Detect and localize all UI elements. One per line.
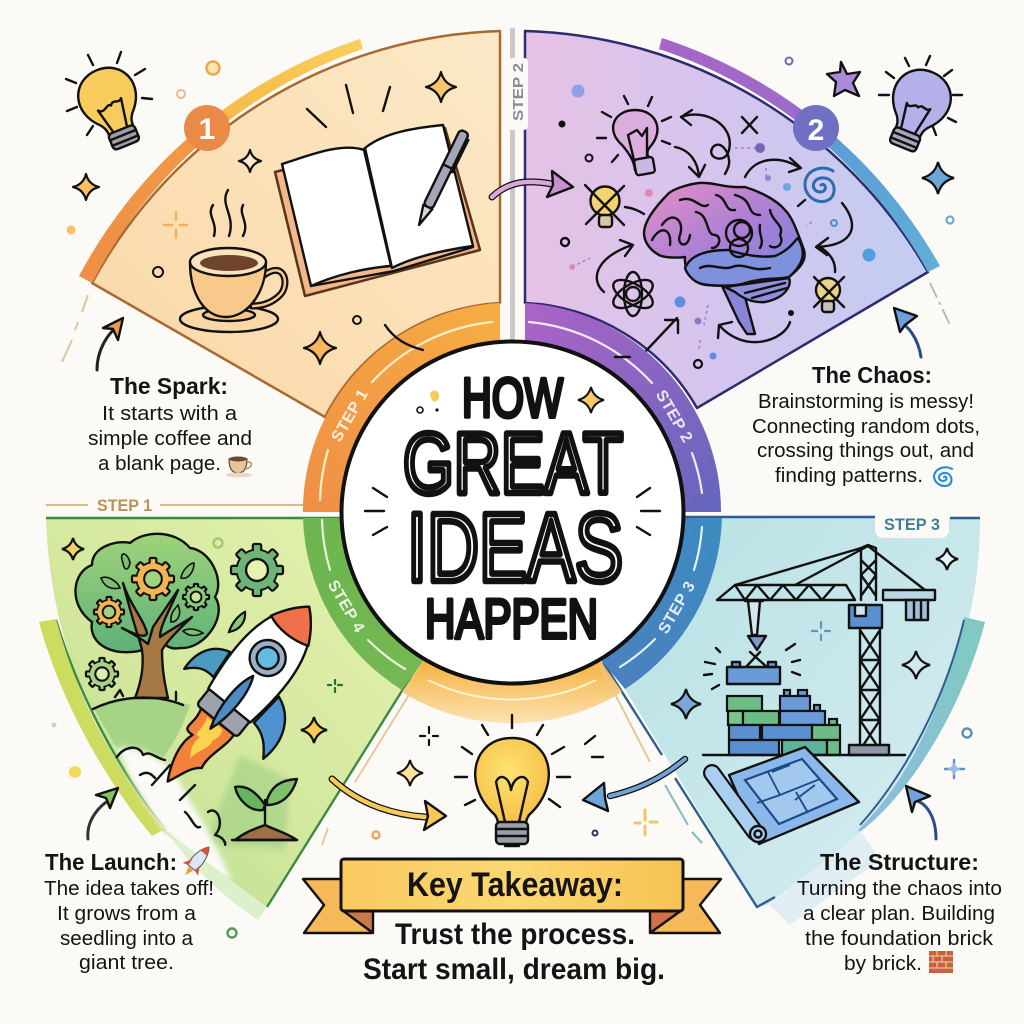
badge: number 2: 2	[808, 114, 824, 147]
divider: top vertical with step 2 tag	[508, 28, 528, 340]
arrow: spark caption	[97, 318, 123, 370]
icon: blue sparkle	[922, 162, 954, 194]
icon: central lightbulb	[372, 715, 657, 846]
ground line	[703, 754, 905, 756]
outer strip: lime	[39, 619, 165, 836]
wedge: blue	[625, 518, 980, 907]
icon: brick wall	[727, 690, 840, 755]
wedge: green	[46, 518, 420, 907]
icon: large gear	[231, 544, 283, 596]
decor: small sparkles and rings	[665, 622, 972, 843]
icon: lightbulb rays	[66, 52, 152, 135]
icon: crossed bulb right	[814, 277, 844, 312]
title decorations	[365, 387, 660, 535]
icon: lightbulb	[70, 59, 154, 156]
icon: hill line	[93, 690, 183, 709]
takeaway text	[363, 918, 665, 986]
icon: mini spiral	[934, 467, 952, 486]
icon: sparkles	[73, 72, 456, 364]
outer strip: purple to blue	[659, 38, 940, 272]
icon: blueprint	[712, 747, 859, 844]
arrows: scribbled	[597, 110, 852, 353]
soft green patch	[205, 755, 290, 850]
caption: the launch: The idea takes off!	[44, 878, 214, 900]
ring: step 1: STEP 1	[328, 386, 372, 445]
arrow: chaos caption	[894, 308, 921, 357]
caption: the structure: the foundation brick	[805, 928, 994, 950]
ring: bottom yellow	[322, 660, 650, 845]
center circle	[342, 342, 684, 684]
ribbon tails	[303, 879, 372, 933]
icon: mini brick	[929, 951, 953, 973]
icon: smoke	[117, 748, 225, 845]
badge: number 1	[184, 105, 230, 151]
caption: the chaos: finding patterns.	[775, 465, 923, 487]
icon: star	[827, 62, 860, 96]
badge: number 2	[793, 105, 839, 151]
ribbon main	[341, 859, 683, 911]
caption: the spark: a blank page.	[98, 453, 221, 475]
title: how great ideas happen: HOW	[462, 366, 563, 429]
arrow: launch to takeaway	[332, 779, 446, 830]
decor: green dots	[52, 538, 342, 938]
pale lower fade	[165, 830, 267, 920]
icon: crossed bulb left	[585, 185, 624, 227]
icon: tree	[75, 534, 219, 698]
icon: crane	[717, 545, 935, 755]
icon: falling brick	[704, 644, 800, 689]
divider: left horizontal with step 1 label: STEP 1	[97, 496, 152, 515]
decor: coloured dots	[558, 58, 954, 368]
wedge: orange	[92, 31, 500, 417]
ring: step 3: STEP 3	[655, 578, 699, 637]
icon: idea bulb	[597, 96, 671, 176]
banner: key takeaway	[303, 859, 721, 933]
caption: the structure: a clear plan. Building	[803, 903, 995, 925]
caption: the spark	[88, 373, 252, 478]
title: how great ideas happen: HAPPEN	[425, 587, 598, 650]
caption: the chaos: crossing things out, and	[757, 440, 974, 462]
panel: step 4 the launch	[39, 518, 420, 938]
banner text: Key Takeaway:	[407, 866, 623, 904]
caption: the spark: The Spark:	[110, 373, 228, 399]
caption: the structure: Turning the chaos into	[797, 878, 1002, 900]
title: how great ideas happen	[403, 366, 623, 650]
scribble marks over ring	[385, 325, 630, 357]
fade lower right	[770, 830, 880, 925]
white fade and smoke	[118, 747, 232, 880]
title: how great ideas happen: GREAT	[403, 416, 623, 512]
arrow: launch caption	[88, 788, 118, 839]
badge: number 1: 1	[199, 113, 215, 146]
arrow: structure to takeaway	[583, 759, 685, 811]
gear: orange small	[94, 597, 124, 627]
icon: open book with pen	[275, 125, 480, 296]
caption: the launch: It grows from a	[57, 903, 197, 925]
wedge outline: green	[46, 518, 420, 907]
outer strip: orange to yellow	[79, 39, 363, 283]
arc line	[860, 620, 964, 825]
icon: x mark	[742, 117, 757, 133]
icon: rocket	[122, 570, 357, 820]
icon: spiral	[805, 168, 834, 202]
divider: top vertical with step 2 tag: STEP 2	[510, 63, 527, 121]
takeaway text: Start small, dream big.	[363, 953, 665, 986]
icon: small gear	[86, 658, 118, 690]
caption: the launch: seedling into a	[60, 928, 194, 950]
icon: lightbulb purple	[875, 56, 962, 158]
icon: sprout	[232, 779, 297, 840]
caption: the launch: giant tree.	[79, 952, 174, 974]
caption: the chaos: Connecting random dots,	[752, 416, 980, 438]
caption: the chaos: The Chaos:	[812, 362, 932, 388]
step 3 label: STEP 3	[884, 515, 940, 534]
icon: mini coffee	[226, 456, 252, 478]
icon: brain	[644, 183, 805, 334]
ring: step 4: STEP 4	[324, 577, 368, 636]
wedge outline	[683, 517, 980, 518]
step 3 label	[875, 510, 949, 538]
arrow: structure caption	[906, 786, 936, 839]
ring: step 4	[303, 518, 424, 690]
caption: the launch	[44, 841, 217, 974]
caption: the structure	[797, 849, 1002, 975]
outer strip: teal	[858, 617, 985, 832]
panel: step 3 the structure	[603, 510, 985, 925]
ribbon folds	[342, 910, 373, 933]
caption: the launch: The Launch:	[45, 849, 177, 875]
ring: step 1	[303, 303, 500, 512]
caption: the chaos: Brainstorming is messy!	[758, 391, 974, 413]
wedge: purple	[525, 31, 928, 408]
gear: green small in tree	[183, 584, 209, 610]
panel: step 2 the chaos	[525, 31, 962, 408]
icon: atom scribble	[609, 272, 657, 316]
icon: sparkles and leaf	[62, 538, 327, 743]
caption: the chaos	[752, 362, 980, 487]
ring: step 3	[601, 518, 722, 689]
takeaway text: Trust the process.	[395, 918, 635, 951]
icon: mini rocket	[177, 841, 217, 882]
panel: step 1 the spark	[62, 31, 500, 417]
decor: circles and rays	[62, 62, 390, 362]
caption: the structure: The Structure:	[820, 849, 979, 875]
gear: orange large	[132, 558, 174, 600]
caption: the structure: by brick.	[844, 953, 922, 975]
arrow: book to brain	[492, 171, 573, 197]
title: how great ideas happen: IDEAS	[407, 493, 623, 602]
caption: the spark: It starts with a	[102, 403, 238, 425]
caption: the spark: simple coffee and	[88, 428, 252, 450]
ring: step 2	[525, 303, 721, 512]
hill	[95, 698, 190, 775]
icon: sparkles	[671, 548, 958, 719]
icon: coffee cup	[180, 190, 285, 332]
wedge left edge	[603, 662, 775, 907]
ring: step 2: STEP 2	[652, 387, 696, 446]
